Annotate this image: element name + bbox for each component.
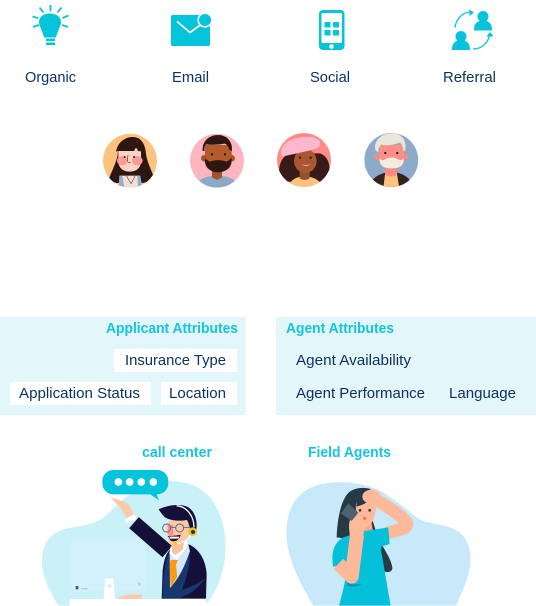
- raised arm: [372, 497, 407, 533]
- neck: [172, 542, 184, 555]
- face: [356, 495, 376, 528]
- pointing hand: [111, 497, 133, 518]
- hand holding phone: [349, 514, 366, 537]
- shirt: [170, 544, 190, 588]
- fringe: [356, 494, 372, 507]
- phone: [341, 503, 358, 521]
- channel: social: [310, 10, 350, 86]
- label: referral: Referral: [443, 70, 496, 86]
- item: agent performance: Agent Performance: [296, 386, 425, 402]
- nose: [168, 525, 173, 536]
- cuff: [125, 515, 137, 524]
- icon: envelope: [171, 13, 212, 46]
- chip: application status: Application Status: [19, 386, 140, 402]
- speech bubble: [102, 470, 168, 500]
- label: email: Email: [172, 70, 209, 86]
- headset: [177, 506, 194, 527]
- heading: call center: call center: [142, 445, 212, 461]
- eyes: [359, 509, 361, 512]
- chip: insurance type: [114, 349, 237, 372]
- glasses: [163, 524, 189, 532]
- avatar: woman with pink beret: [277, 133, 331, 188]
- channel: email: [171, 13, 212, 86]
- icon: light bulb: [32, 5, 68, 45]
- front hand on desk: [118, 594, 142, 599]
- long hair: [337, 488, 392, 572]
- raised arm sleeve: [134, 523, 167, 552]
- channel: organic: [25, 5, 76, 86]
- channel: referral: [443, 10, 496, 86]
- lapel: [163, 551, 205, 599]
- avatar: woman with fringe: [103, 134, 157, 188]
- nose: [363, 517, 366, 520]
- panel: applicant attributes: [0, 317, 246, 415]
- chip: application status: [10, 382, 151, 405]
- head: [166, 517, 190, 546]
- hair: [159, 505, 197, 532]
- background blob: [42, 481, 226, 606]
- illustration: stressed field agent: [286, 482, 471, 606]
- background blob: [286, 482, 471, 606]
- neck: [362, 523, 373, 535]
- hand on head: [362, 490, 381, 504]
- collar: [169, 540, 189, 560]
- icon: smartphone: [319, 10, 344, 50]
- chip: insurance type: Insurance Type: [125, 353, 226, 369]
- heading: field agents: Field Agents: [308, 445, 391, 461]
- icon: referral people with arrows: [452, 10, 494, 50]
- heading: applicant attributes: Applicant Attributes: [106, 321, 238, 337]
- teal shirt: [332, 527, 391, 606]
- tie: [170, 560, 178, 588]
- elbow shadow: [346, 578, 362, 587]
- chip: location: Location: [169, 386, 226, 402]
- avatar: bearded man: [190, 134, 244, 188]
- bent arm: [338, 535, 357, 577]
- agent figure: [111, 497, 207, 599]
- panel: agent attributes: [276, 317, 536, 415]
- heading: agent attributes: Agent Attributes: [286, 321, 394, 337]
- avatar: old man with white beard: [364, 133, 418, 188]
- chip: location: [161, 382, 237, 405]
- item: language: Language: [449, 386, 516, 402]
- monitor: [71, 539, 147, 599]
- field agent figure: [332, 488, 407, 606]
- item: agent availability: Agent Availability: [296, 353, 412, 369]
- label: social: Social: [310, 70, 350, 86]
- illustration: call center agent: [42, 470, 226, 606]
- label: organic: Organic: [25, 70, 76, 86]
- torso: [162, 544, 207, 599]
- desk: [69, 599, 207, 606]
- smile: [168, 535, 181, 541]
